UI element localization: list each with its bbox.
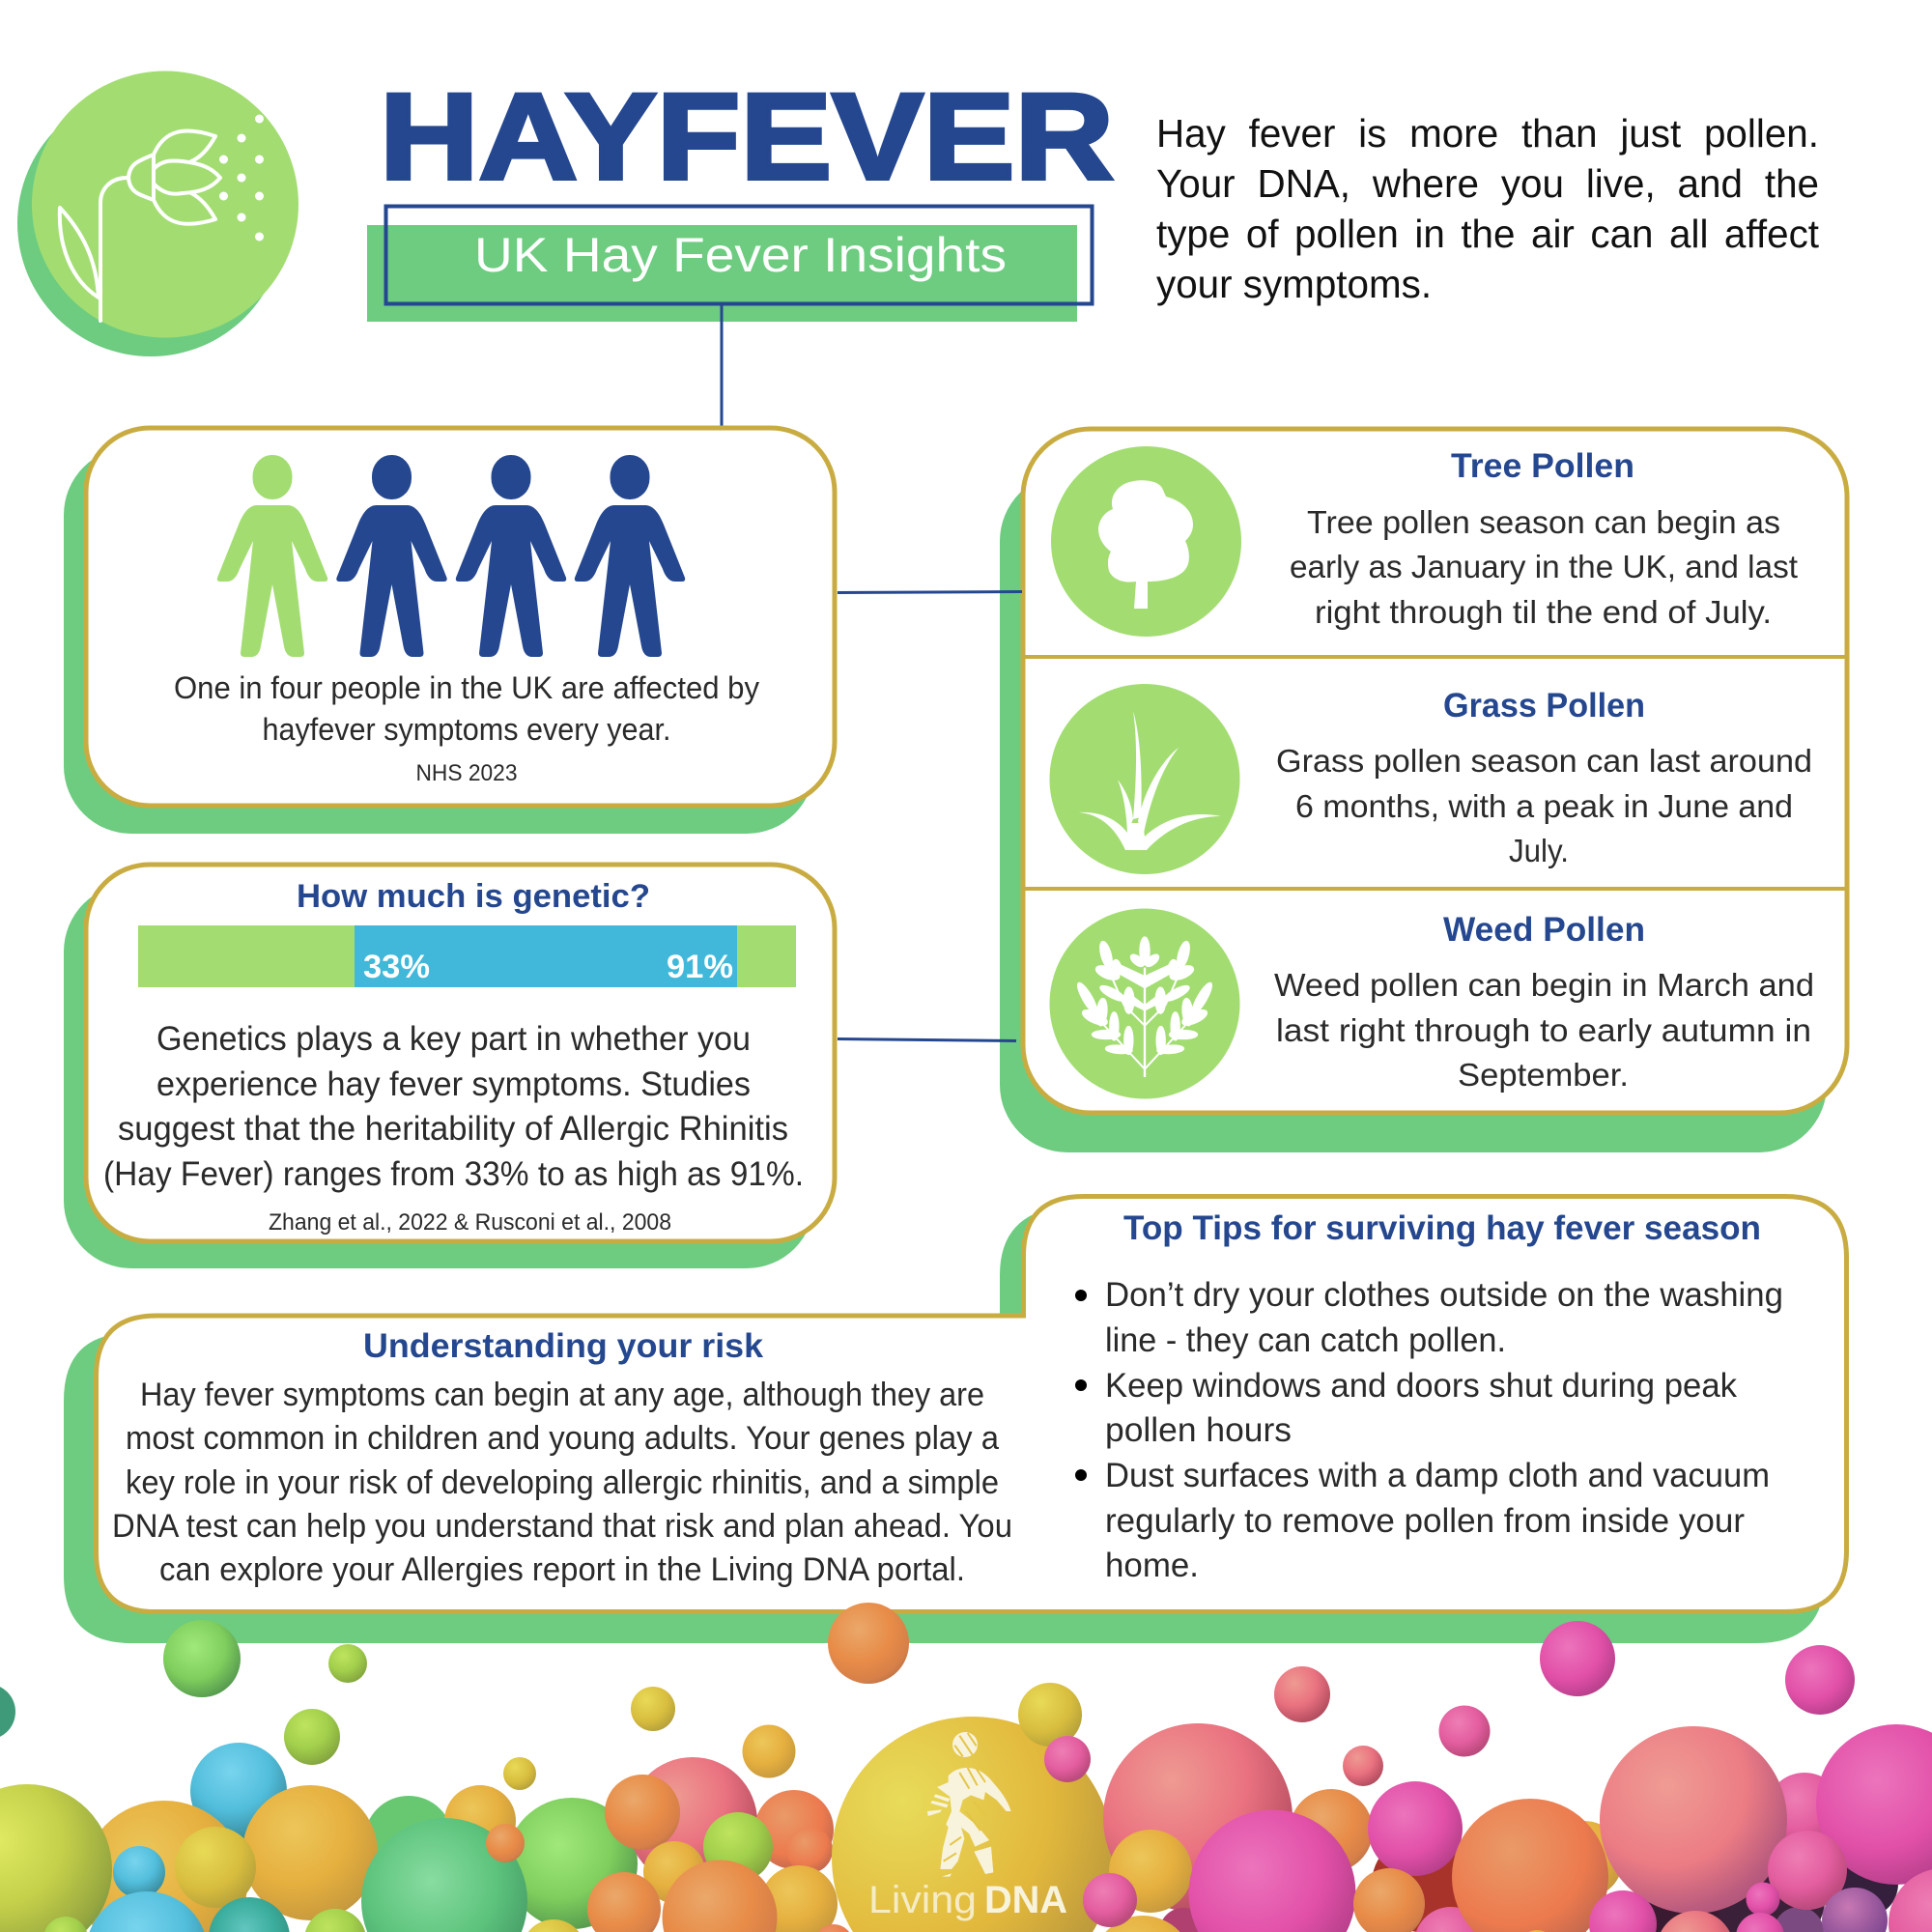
intro text block: Hay fever is more than just pollen.	[1156, 111, 1819, 156]
connector: statistic card to tree pollen	[838, 591, 1022, 593]
grass pollen text: 6 months, with a peak in June and	[1295, 788, 1793, 824]
top tips list: regularly to remove pollen from inside your	[1105, 1502, 1745, 1540]
intro text block: Your DNA, where you live, and the	[1156, 161, 1819, 206]
genetics text: suggest that the heritability of Allergic Rhinitis	[118, 1110, 788, 1148]
weed pollen text	[1274, 911, 1814, 1093]
genetics text: experience hay fever symptoms. Studies	[156, 1065, 751, 1103]
genetics text: (Hay Fever) ranges from 33% to as high as 91%.	[103, 1155, 804, 1193]
people icons	[217, 455, 685, 657]
tree pollen text: Tree pollen season can begin as	[1307, 504, 1780, 540]
grass pollen text: July.	[1509, 833, 1569, 868]
tree pollen text: right through til the end of July.	[1315, 594, 1772, 630]
genetics text: Genetics plays a key part in whether you	[156, 1020, 751, 1058]
icon: tree	[1051, 446, 1241, 637]
subtitle banner: UK Hay Fever Insights	[474, 228, 1007, 282]
panel: one in four statistic	[64, 428, 835, 834]
top tips heading: Top Tips for surviving hay fever season	[1123, 1209, 1761, 1247]
icon: weed	[1049, 908, 1240, 1099]
connector: banner to statistic card	[721, 305, 723, 426]
genetics text	[103, 1020, 804, 1236]
heritability range bar	[138, 925, 796, 987]
weed pollen text: Weed pollen can begin in March and	[1274, 967, 1814, 1003]
panel: how much is genetic	[64, 865, 835, 1268]
understanding your risk text: Hay fever symptoms can begin at any age, although they are	[140, 1377, 984, 1413]
logo wordmark: Living	[868, 1879, 977, 1921]
intro text block: your symptoms.	[1156, 262, 1432, 306]
tree pollen text: early as January in the UK, and last	[1290, 549, 1798, 584]
grass pollen text: Grass Pollen	[1443, 687, 1645, 724]
tree pollen text	[1290, 447, 1798, 630]
weed pollen text: Weed Pollen	[1443, 911, 1645, 949]
intro text block: type of pollen in the air can all affect	[1156, 212, 1819, 256]
genetics text: Zhang et al., 2022 & Rusconi et al., 2008	[269, 1209, 671, 1236]
grass pollen text	[1276, 687, 1812, 868]
intro text block	[1156, 111, 1819, 306]
top tips list: Keep windows and doors shut during peak	[1105, 1367, 1737, 1405]
understanding your risk text: most common in children and young adults. Your genes play a	[126, 1420, 999, 1457]
tree pollen text: Tree Pollen	[1451, 447, 1634, 485]
top tips list: pollen hours	[1105, 1411, 1292, 1449]
statistic text: One in four people in the UK are affected by	[174, 670, 759, 705]
panel: pollen types	[1000, 429, 1847, 1152]
logo: flower icon	[17, 71, 298, 356]
genetics heading: How much is genetic?	[297, 878, 650, 915]
top tips list	[1075, 1276, 1783, 1584]
understanding your risk text	[112, 1377, 1012, 1588]
icon: grass	[1049, 684, 1240, 874]
weed pollen text: last right through to early autumn in	[1276, 1012, 1811, 1048]
title: HAYFEVER	[380, 68, 1114, 205]
top tips list: Don’t dry your clothes outside on the washing	[1105, 1276, 1783, 1314]
logo wordmark: DNA	[984, 1879, 1067, 1921]
top tips list: line - they can catch pollen.	[1105, 1321, 1506, 1359]
understanding your risk text: DNA test can help you understand that risk and plan ahead. You	[112, 1508, 1012, 1545]
understanding your risk heading: Understanding your risk	[363, 1327, 764, 1365]
connector: genetics card to weed pollen	[838, 1039, 1016, 1041]
statistic text: NHS 2023	[415, 760, 518, 786]
heritability range bar: 91%	[667, 949, 733, 985]
top tips list: home.	[1105, 1547, 1199, 1584]
top tips list: Dust surfaces with a damp cloth and vacuum	[1105, 1457, 1770, 1494]
grass pollen text: Grass pollen season can last around	[1276, 743, 1812, 779]
panel: understanding risk and top tips	[64, 1196, 1847, 1643]
understanding your risk text: key role in your risk of developing allergic rhinitis, and a simple	[126, 1464, 999, 1501]
statistic text: hayfever symptoms every year.	[263, 712, 670, 747]
statistic text	[174, 670, 759, 786]
understanding your risk text: can explore your Allergies report in the Living DNA portal.	[159, 1551, 965, 1588]
heritability range bar: 33%	[363, 949, 430, 985]
decorative spheres	[0, 1603, 1932, 1932]
icon: Living DNA logo figure	[927, 1732, 1011, 1877]
subtitle banner	[367, 207, 1092, 322]
weed pollen text: September.	[1458, 1057, 1629, 1093]
